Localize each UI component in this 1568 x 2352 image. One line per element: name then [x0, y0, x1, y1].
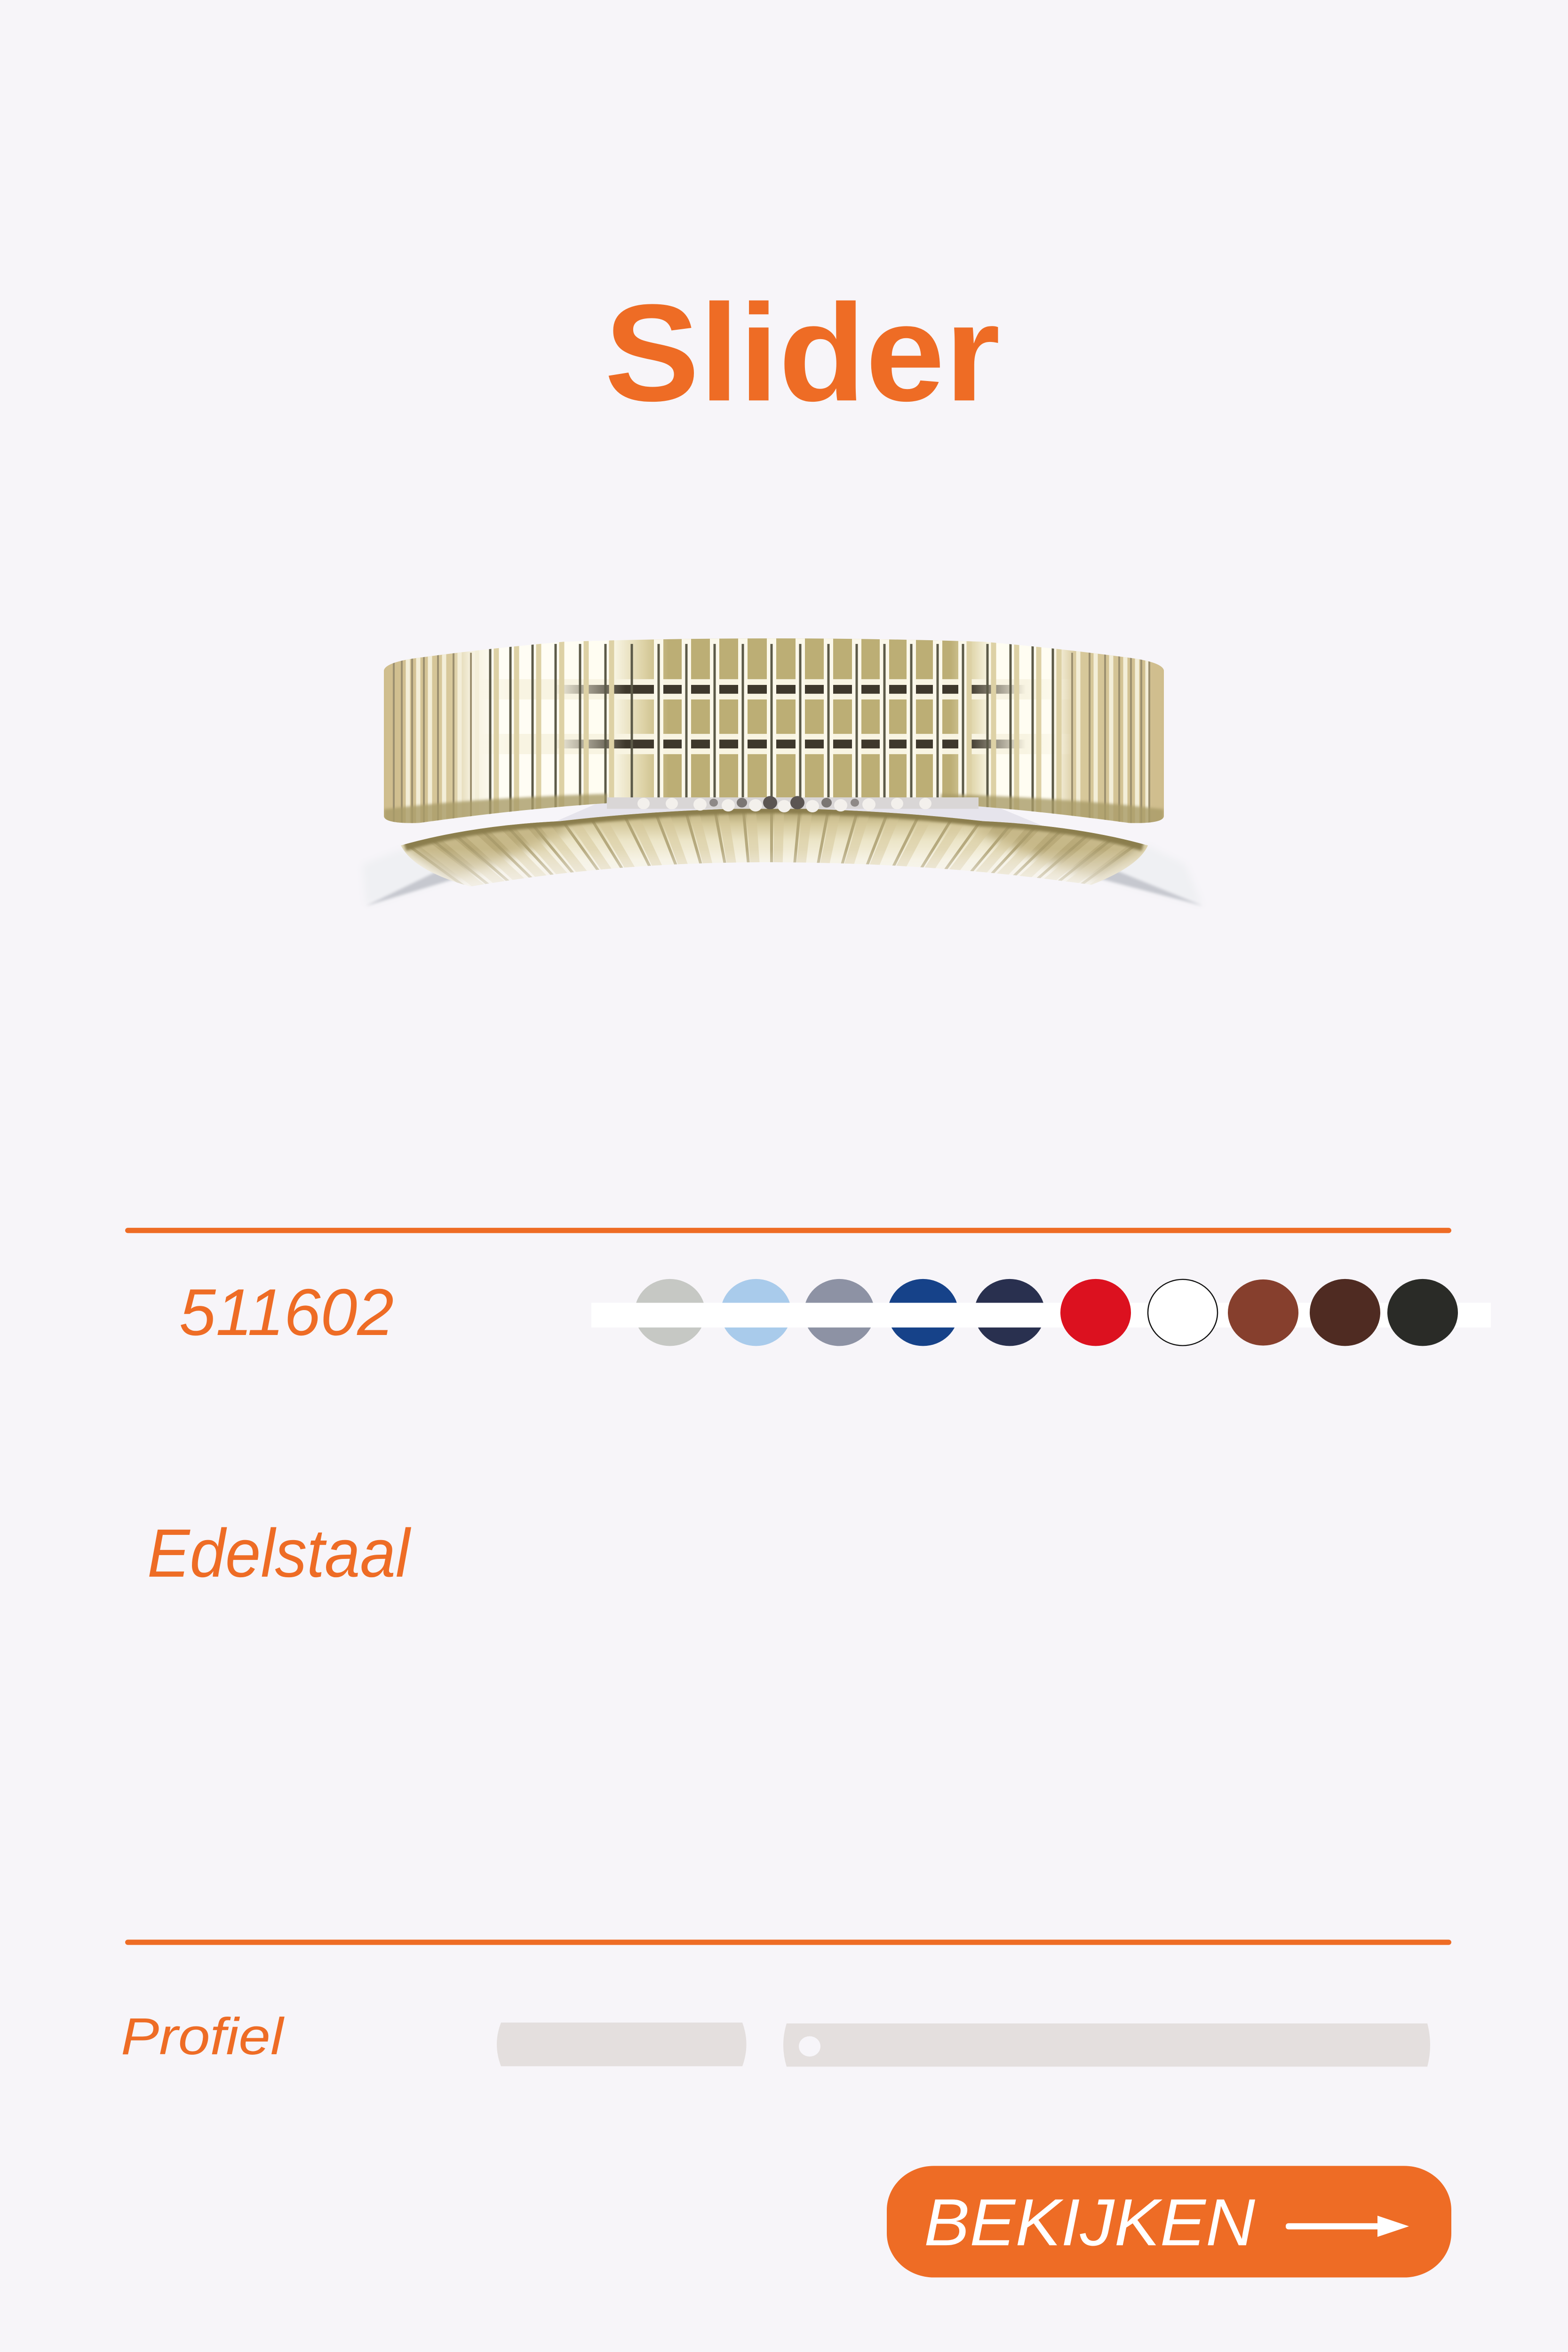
bottom divider line [128, 1939, 1449, 1945]
olive lower edge [384, 794, 607, 829]
white strip across swatches [591, 1303, 1491, 1327]
cross rails [470, 679, 1073, 754]
button label: BEKIJKEN [924, 2185, 1255, 2260]
dark link separators [490, 644, 1053, 829]
swatch: silver grey [635, 1279, 705, 1346]
dark slots [555, 685, 1026, 748]
title: Slider [605, 276, 1000, 430]
swatch: blue grey [804, 1279, 875, 1346]
swatch: light blue [721, 1279, 791, 1346]
colour swatches [591, 1279, 1491, 1346]
upper bracelet band [381, 635, 1167, 829]
gold stripes at the sides [496, 635, 1059, 829]
button: bekijken [887, 2166, 1451, 2278]
profile label: Profiel [121, 2008, 285, 2066]
swatch: cognac [1228, 1279, 1298, 1345]
product photo: stretch watch bracelet [368, 638, 1200, 906]
swatch: red [1060, 1279, 1131, 1346]
swatch: navy [974, 1279, 1045, 1346]
lilac strap under bracelet [528, 799, 1063, 834]
bead row between bands [607, 796, 979, 812]
article number: 511602 [179, 1275, 394, 1349]
top divider line [128, 1228, 1449, 1233]
lower bracelet crescent [401, 809, 1148, 886]
right strap shadow [1096, 844, 1203, 906]
icon: arrow [1286, 2216, 1409, 2237]
swatch: black [1387, 1279, 1458, 1346]
profile bar: long with dot [783, 2024, 1430, 2066]
swatch: white [1148, 1279, 1218, 1345]
swatch: royal blue [888, 1279, 958, 1346]
left strap shadow [362, 849, 459, 906]
swatch: dark brown [1310, 1279, 1380, 1346]
highlight separators [654, 638, 967, 798]
material label: Edelstaal [147, 1515, 411, 1591]
profile bar: short [497, 2023, 746, 2066]
